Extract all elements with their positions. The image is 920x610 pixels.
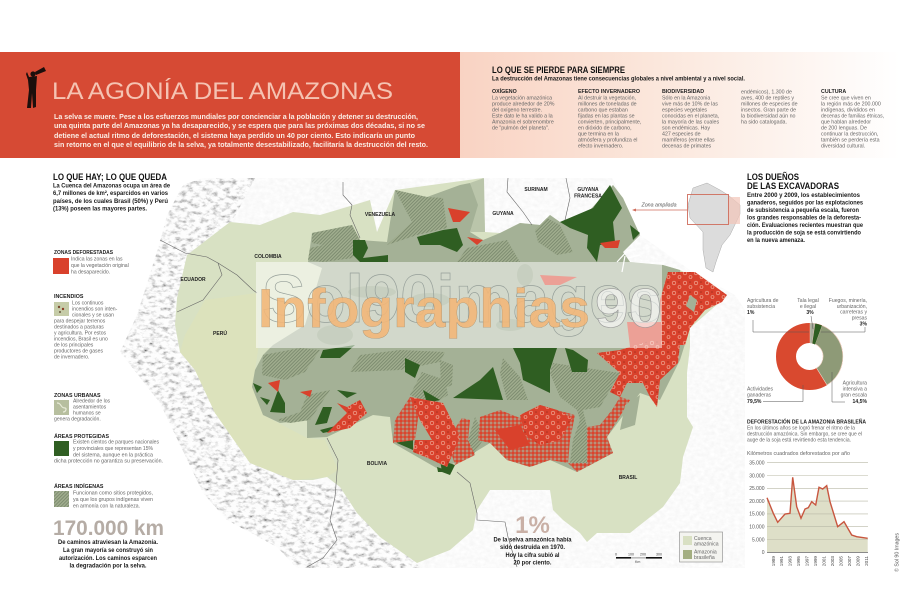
column: biodiversidad: aves, 400 de reptiles y	[741, 96, 794, 102]
column: cultura: de 200 lenguas. De	[821, 126, 867, 132]
icon: man with megaphone	[26, 67, 46, 108]
callout: 170.000 km: 170.000 km	[53, 517, 164, 540]
x axis labels: 2005	[838, 556, 844, 566]
column: efecto invernadero: Al destruir la vegetación,	[578, 96, 636, 102]
inset: South America locator	[632, 183, 740, 272]
legend: áreas protegidas	[54, 433, 163, 464]
donut labels: Actividades	[747, 386, 774, 392]
y axis labels: 5.000	[752, 537, 765, 543]
watermark band: Sol90images	[262, 261, 662, 337]
legend: áreas protegidas: dicha protección no garantiza su preservación.	[54, 458, 163, 464]
column: biodiversidad: especies vegetales	[662, 108, 707, 114]
map legend: Amazonia	[694, 550, 717, 556]
column: cultura: CULTURA	[821, 89, 846, 95]
scale bar: 100	[628, 552, 634, 556]
donut labels: Agricultura	[843, 380, 867, 386]
column: efecto invernadero: en dióxido de carbono,	[578, 126, 632, 132]
column: efecto invernadero: fijadas en las plantas se	[578, 114, 635, 120]
donut labels: subsistencia	[747, 304, 775, 310]
y axis labels: 10.000	[749, 524, 765, 530]
section: los dueños de las excavadoras: la producción de soja se está convirtiendo	[747, 230, 861, 236]
column: biodiversidad: BIODIVERSIDAD	[662, 89, 704, 95]
legend: incendios: para despejar terrenos	[54, 318, 106, 324]
legend: áreas protegidas: y provinciales que representan 15%	[73, 446, 153, 452]
column: efecto invernadero: EFECTO INVERNADERO	[578, 89, 640, 95]
column: efecto invernadero	[578, 89, 641, 150]
donut slice: logging	[810, 323, 815, 344]
country labels: VENEZUELA	[365, 212, 396, 218]
legend: zonas deforestadas: ZONAS DEFORESTADAS	[54, 250, 113, 256]
x axis labels: 1991	[779, 556, 784, 566]
x axis labels: 1995	[796, 556, 801, 566]
country labels: SURINAM	[524, 187, 548, 193]
section: los dueños de las excavadoras: Entre 2000 y 2009, los establecimientos	[747, 192, 860, 199]
donut labels: Fuegos, minería,	[829, 298, 867, 304]
intro text: sin retorno en el que el equilibrio de la selva, ya totalmente desestabilizado, facilitaría la destrucción del resto.	[54, 140, 428, 149]
urban / fire rings	[327, 272, 727, 467]
country labels: COLOMBIA	[254, 254, 282, 260]
legend: áreas indígenas: ÁREAS INDÍGENAS	[54, 482, 104, 490]
watermark band: Infographias	[258, 277, 590, 339]
legend: zonas urbanas	[54, 393, 111, 422]
donut labels: carreteras y	[840, 310, 867, 316]
copyright: © Sol 90 Images	[894, 533, 900, 572]
column: oxígeno: Este dato le ha valido a la	[492, 114, 553, 120]
legend: incendios: INCENDIOS	[54, 294, 84, 300]
legend: áreas indígenas: ya que los grupos indígenas viven	[73, 497, 153, 503]
map legend: brasileña	[694, 555, 715, 561]
scale bar: 200	[640, 552, 646, 556]
section: los dueños de las excavadoras: ción. Evaluaciones recientes muestran que	[747, 222, 863, 229]
area under curve	[767, 477, 868, 552]
legend: áreas protegidas: del sistema, aunque en la práctica	[73, 452, 153, 458]
y axis labels: 15.000	[749, 512, 765, 518]
column: cultura: continuar la destrucción,	[821, 132, 878, 138]
data line	[767, 477, 868, 538]
section: lo que hay, lo que queda: LO QUE HAY; LO QUE QUEDA	[53, 172, 167, 183]
column: efecto invernadero: carbono que estaban	[578, 108, 628, 114]
map legend: Cuenca	[694, 536, 712, 542]
donut leader lines	[753, 316, 865, 402]
protected areas: dark green	[253, 185, 690, 475]
legend: incendios: destinados a pasturas	[54, 324, 104, 330]
donut labels: 1%	[747, 310, 755, 316]
legend: zonas deforestadas: que la vegetación original	[71, 263, 129, 269]
section: lo que hay, lo que queda: 6,7 millones de km², esparcidos en varios	[53, 190, 168, 197]
chart: deforestation in the Brazilian Amazon: destrucción amazónica. Sin embargo, se cree que el	[747, 432, 862, 438]
river mouth	[617, 250, 640, 272]
country labels: PERÚ	[213, 330, 227, 337]
column: efecto invernadero: convierten, principalmente,	[578, 120, 641, 126]
section: lo que hay, lo que queda: La Cuenca del Amazonas ocupa un área de	[53, 182, 170, 190]
callout: 170.000 km: la degradación por la selva.	[70, 562, 147, 570]
x axis labels: 1993	[788, 556, 792, 566]
callout: 1%: 1%	[515, 512, 550, 539]
deforested zones: red	[268, 208, 727, 467]
column: biodiversidad: decenas de primates	[662, 144, 712, 150]
x axis labels: 1989	[771, 556, 776, 566]
intro text: La selva se muere. Pese a los esfuerzos mundiales por concienciar a la población y detener su destrucción,	[54, 112, 418, 121]
y axis labels: 20.000	[749, 499, 765, 505]
column: oxígeno: Amazonia el sobrenombre	[492, 120, 554, 126]
callout: 170.000 km: autorización. Los caminos esparcen	[59, 555, 157, 562]
legend: áreas indígenas	[54, 482, 153, 510]
legend: áreas protegidas: ÁREAS PROTEGIDAS	[54, 433, 110, 440]
country labels: ECUADOR	[180, 277, 206, 283]
section: lo que hay, lo que queda: (13%) poseen las mayores partes.	[53, 206, 147, 212]
column: biodiversidad: millones de especies de	[741, 102, 798, 108]
section: los dueños de las excavadoras: los grandes responsables de la deforesta-	[747, 214, 861, 222]
scale bar	[615, 552, 662, 564]
callout: 1%	[494, 512, 572, 566]
scale bar: Km	[635, 560, 640, 564]
donut labels: intensiva a	[843, 386, 867, 392]
column: oxígeno	[492, 87, 555, 132]
intro text: una quinta parte del Amazonas ya ha desaparecido, y se espera que para las próximas dos décadas, si no se	[54, 121, 425, 130]
column: biodiversidad: ha sido catalogada.	[741, 120, 787, 126]
x axis labels: 1999	[813, 556, 818, 566]
legend: zonas urbanas: Alrededor de los	[73, 398, 111, 404]
section: lo que hay, lo que queda: países, de los cuales Brasil (50%) y Perú	[53, 198, 168, 205]
donut labels: 79,5%	[747, 399, 762, 405]
column: biodiversidad: endémicos), 1.300 de	[741, 90, 792, 96]
section: los dueños de las excavadoras: en la nueva amenaza.	[747, 237, 805, 244]
y axis labels: 0	[762, 550, 765, 556]
legend: incendios: de invernadero.	[54, 354, 89, 360]
chart: deforestation in the Brazilian Amazon: DEFORESTACIÓN DE LA AMAZONIA BRASILEÑA	[747, 418, 866, 426]
legend: áreas indígenas: en armonía con la naturaleza.	[73, 504, 140, 510]
donut labels: urbanización,	[837, 304, 867, 310]
callout: 1%: 20 por ciento.	[514, 560, 552, 566]
legend: zonas deforestadas: ha desaparecido.	[71, 270, 110, 276]
donut slice: intensive agriculture	[815, 326, 843, 385]
degraded mixed zones: mottled	[393, 397, 630, 472]
callout: 1%: Hoy la cifra subió al	[506, 552, 560, 559]
y axis labels: 25.000	[749, 486, 765, 492]
section: lo que hay, lo que queda	[53, 172, 170, 212]
country labels: GUYANA	[492, 211, 514, 217]
legend: incendios: productores de gases	[54, 348, 103, 354]
legend: áreas indígenas: Funcionan como sitios protegidos,	[73, 490, 153, 496]
column: oxígeno: La vegetación amazónica	[492, 96, 552, 102]
column: biodiversidad: conocidas en el planeta,	[662, 114, 719, 120]
map legend	[680, 532, 722, 562]
section: los dueños de las excavadoras: DE LAS EXCAVADORAS	[747, 181, 839, 192]
basin: pale green	[175, 178, 727, 563]
donut labels: presas	[852, 316, 867, 322]
legend: incendios	[54, 294, 118, 360]
donut labels: e ilegal	[800, 304, 816, 310]
scale bar: 300	[656, 552, 662, 556]
arrow: zona ampliada: Zona ampliada	[640, 202, 677, 208]
legend: incendios: incendios son inten-	[72, 306, 118, 312]
x axis labels: 2003	[830, 556, 835, 566]
legend: áreas protegidas: Existen cientos de parques nacionales	[73, 440, 159, 446]
non-deforested islets	[620, 295, 697, 430]
donut chart: causes of deforestation	[747, 298, 867, 405]
map legend: amazónica	[694, 542, 719, 548]
y axis labels: 35.000	[749, 460, 765, 466]
column: oxígeno: produce alrededor de 20%	[492, 102, 555, 108]
legend: incendios: cionales y se usan	[72, 312, 114, 318]
chart: deforestation in the Brazilian Amazon	[747, 418, 869, 566]
x axis labels: 1997	[804, 556, 810, 566]
chart: deforestation in the Brazilian Amazon: Kilómetros cuadrados deforestados por año	[747, 451, 850, 457]
column: cultura: la región más de 200.000	[821, 102, 881, 108]
legend: incendios: y agricultura. Por estos	[54, 330, 107, 336]
donut labels: gran escala	[841, 392, 867, 398]
column: biodiversidad: 427 especies de	[662, 132, 701, 138]
column: cultura: que hablan alrededor	[821, 120, 871, 126]
x axis labels: 2009	[856, 556, 860, 566]
y axis labels	[749, 460, 765, 556]
chart: deforestation in the Brazilian Amazon: En los últimos años se logró frenar el ritmo de la	[747, 426, 855, 432]
section: los dueños de las excavadoras: ganaderos, seguidos por las explotaciones	[747, 200, 863, 206]
x axis labels: 2011	[864, 556, 869, 566]
column: biodiversidad: Sólo en la Amazonia	[662, 96, 710, 102]
chart: deforestation in the Brazilian Amazon: auge de la soja está revirtiendo esta tendencia.	[747, 438, 851, 444]
column: biodiversidad: insectos. Gran parte de	[741, 108, 796, 114]
column: biodiversidad: son endémicas. Hay	[662, 126, 710, 132]
column: biodiversidad: la mayoría de las cuales	[662, 120, 719, 126]
x axis labels: 2001	[822, 556, 826, 566]
section: los dueños de las excavadoras: LOS DUEÑOS	[747, 172, 799, 183]
donut labels: 3%	[806, 310, 814, 316]
column: efecto invernadero: que termina en la	[578, 132, 619, 138]
column: cultura: también se perdería esta	[821, 138, 880, 144]
y axis labels: 30.000	[749, 473, 765, 479]
country labels: GUYANA	[577, 187, 599, 193]
legend: zonas urbanas: genera degradación.	[54, 416, 101, 422]
column: cultura: decenas de familias étnicas,	[821, 114, 884, 120]
column: biodiversidad: vive más de 10% de las	[662, 102, 718, 108]
column: cultura: indígenas, divididos en	[821, 108, 875, 114]
column: biodiversidad: la biodiversidad aún no	[741, 114, 796, 120]
map of the Amazon basin	[120, 178, 746, 568]
intro text: detiene el actual ritmo de deforestación, el sistema haya perdido un 40 por ciento. Esto indicaría un punto	[54, 131, 415, 140]
country labels	[180, 187, 637, 481]
heading: LO QUE SE PIERDE PARA SIEMPRE	[492, 65, 625, 76]
column: oxígeno: del oxígeno terrestre.	[492, 108, 542, 114]
indigenous areas: hatched	[262, 190, 620, 463]
title: LA AGONÍA DEL AMAZONAS	[52, 78, 393, 105]
borders	[160, 178, 570, 567]
legend: incendios: incendios, Brasil es uno	[54, 336, 108, 342]
watermark band: 90	[595, 277, 662, 339]
donut labels: 3%	[860, 322, 867, 328]
callout: 170.000 km	[53, 517, 164, 570]
callout: 170.000 km: La gran mayoría se construyó sin	[63, 547, 153, 554]
Brazilian Amazon: olive	[252, 183, 690, 472]
column: oxígeno: OXÍGENO	[492, 87, 517, 95]
donut labels: 14,5%	[853, 399, 867, 405]
legend: zonas urbanas: ZONAS URBANAS	[54, 393, 101, 399]
legend: incendios: de los principales	[54, 342, 94, 348]
legend: zonas deforestadas: Indica las zonas en las	[71, 256, 123, 262]
legend: zonas urbanas: humanos se	[73, 410, 101, 416]
donut labels: Tala legal	[797, 298, 819, 304]
grid lines	[767, 463, 868, 552]
country labels: BOLIVIA	[367, 461, 388, 467]
donut labels	[747, 298, 867, 405]
section: los dueños de las excavadoras: de subsistencia a pequeña escala, fueron	[747, 207, 859, 214]
legend: zonas deforestadas	[53, 250, 129, 276]
panel: lo que se pierde para siempre	[460, 52, 900, 158]
scale bar: 0	[615, 552, 617, 556]
callout: 170.000 km: De caminos atraviesan la Amazonía.	[58, 539, 158, 546]
subheading: La destrucción del Amazonas tiene consecuencias globales a nivel ambiental y a nivel social.	[492, 76, 745, 82]
x axis labels	[771, 556, 869, 566]
legend: incendios: Los continuos	[72, 300, 104, 306]
callout: 1%: sido destruida en 1970.	[500, 544, 565, 551]
callout: 1%: De la selva amazónica había	[494, 536, 572, 544]
donut slice: fires, mining, roads	[812, 324, 822, 344]
country labels: FRANCESA	[574, 194, 602, 200]
x axis labels: 2007	[847, 556, 852, 566]
country labels: BRASIL	[619, 475, 637, 481]
darker olive patches	[317, 264, 533, 345]
column: efecto invernadero: atmósfera y profundiza el	[578, 138, 637, 144]
panel: red title banner	[0, 52, 460, 158]
column: efecto invernadero: efecto invernadero.	[578, 144, 623, 150]
column: efecto invernadero: millones de toneladas de	[578, 102, 637, 108]
column: oxígeno: de "pulmón del planeta".	[492, 126, 549, 132]
intro text	[54, 112, 428, 149]
section: los dueños de las excavadoras	[747, 172, 863, 244]
column: biodiversidad: mamíferos (entre ellas	[662, 138, 715, 144]
column: cultura: diversidad cultural.	[821, 144, 865, 150]
column: cultura	[821, 89, 884, 150]
legend: zonas urbanas: asentamientos	[73, 404, 107, 410]
column: cultura: Se cree que viven en	[821, 96, 871, 102]
column: biodiversidad	[662, 89, 798, 150]
donut labels: ganaderas	[747, 392, 772, 398]
donut labels: Agricultura de	[747, 298, 779, 304]
